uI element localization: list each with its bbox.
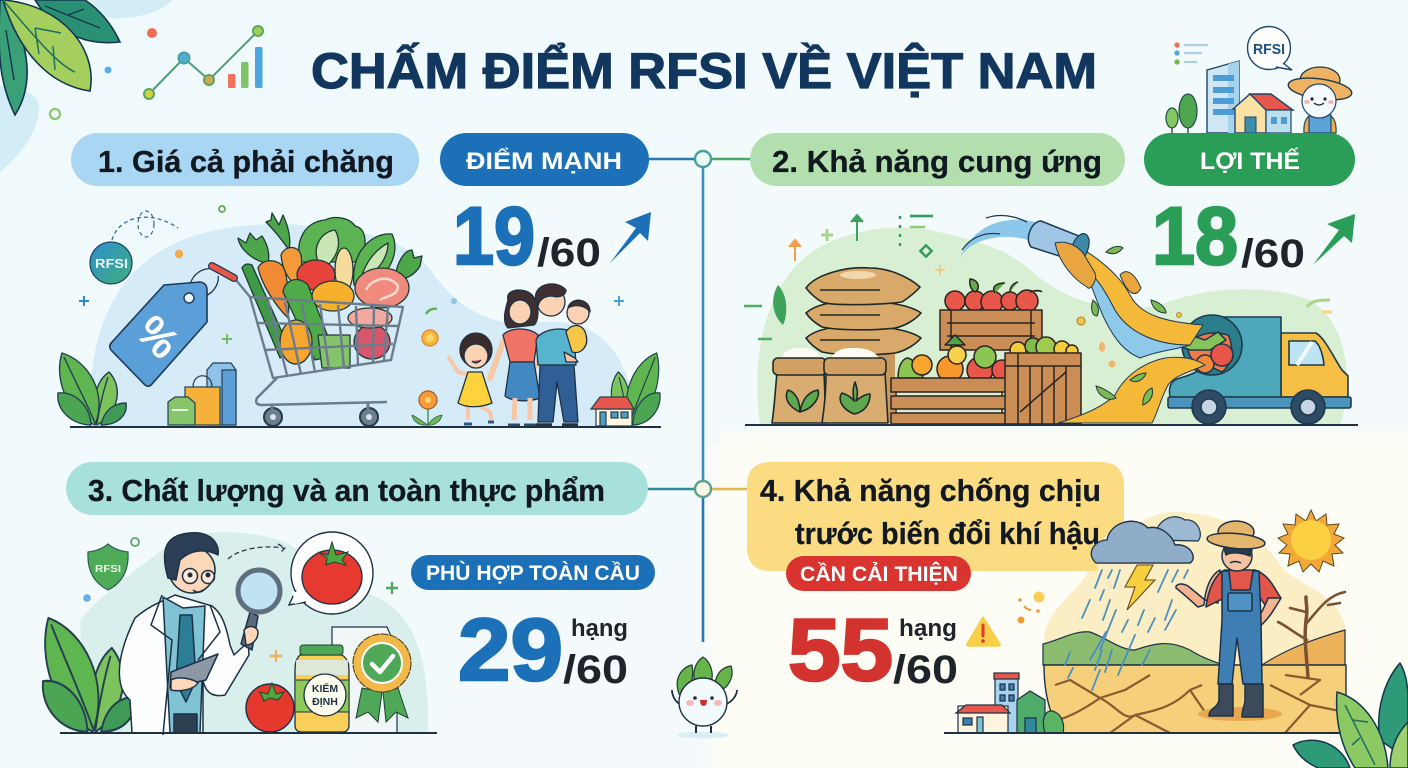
badge: advantage <box>1144 133 1355 186</box>
arrow up <box>1313 214 1355 265</box>
panel: 2 availability <box>744 133 1358 425</box>
ground line <box>944 732 1340 734</box>
background blob <box>1044 512 1345 733</box>
icon: vegetables in cart <box>238 213 422 368</box>
heading pill: availability: 2. Khả năng cung ứng <box>772 144 1102 179</box>
badge: globally aligned <box>411 555 655 590</box>
heading pill: quality <box>66 462 648 515</box>
arrow up <box>610 212 651 263</box>
illustration: food scientist <box>43 532 437 735</box>
father <box>536 284 578 425</box>
score rank 29/60 <box>458 600 628 699</box>
icon: RFSI ball: RFSI <box>95 256 128 271</box>
score rank 29/60: hạng <box>571 615 628 642</box>
icon: crates of produce <box>891 279 1081 424</box>
score 19/60 <box>453 191 601 282</box>
badge: needs improvement: CẦN CẢI THIỆN <box>800 562 958 586</box>
storm cloud overlapping heading <box>1091 521 1193 563</box>
decoration: top-right town and mascot <box>1166 26 1353 133</box>
background blob <box>90 224 640 427</box>
icon: shopping cart <box>236 280 403 426</box>
score 18/60 <box>1152 191 1305 282</box>
icon: jar labelled KIEM DINH: KIỂM <box>312 682 338 695</box>
score 18/60: /60 <box>1241 232 1305 276</box>
panel: 3 quality and food safety <box>43 462 655 735</box>
score rank 29/60: /60 <box>563 648 628 692</box>
icon: delivery truck <box>1168 315 1351 424</box>
icon: RFSI ball <box>90 211 178 284</box>
icon: village <box>956 673 1064 733</box>
heading box: climate resilience: trước biến đổi khí hậu <box>795 516 1100 551</box>
background blob <box>757 227 1347 425</box>
icon: small house <box>591 397 634 426</box>
icon: flower and coin <box>412 309 442 425</box>
score rank 55/60: hạng <box>899 615 957 642</box>
icon: plants <box>58 353 126 425</box>
heading pill: affordability: 1. Giá cả phải chăng <box>98 144 394 179</box>
baby <box>564 300 590 362</box>
ground line <box>60 732 437 734</box>
score rank 29/60: 29 <box>458 600 563 699</box>
mother <box>490 290 542 425</box>
heading box: climate resilience: 4. Khả năng chống chịu <box>760 473 1101 508</box>
icon: warning triangle <box>967 617 1000 646</box>
badge: needs improvement <box>786 556 971 591</box>
decoration: top-right town and mascot: RFSI <box>1253 41 1285 58</box>
decoration: bottom-right leaves <box>1293 663 1408 768</box>
score rank 55/60: 55 <box>788 600 893 699</box>
score 19/60: 19 <box>453 191 535 282</box>
icon: jar labelled KIEM DINH <box>295 645 349 732</box>
score rank 55/60 <box>788 600 958 699</box>
icon: family <box>449 284 590 425</box>
heading pill: affordability <box>71 133 419 186</box>
badge: strength: ĐIỂM MẠNH <box>466 147 622 175</box>
icon: scientist <box>119 533 280 735</box>
icon: tipping pipe and flow <box>960 215 1205 423</box>
decoration: top-left leaves <box>0 0 120 115</box>
icon: price tag: % <box>126 306 189 369</box>
badge: globally aligned: PHÙ HỢP TOÀN CẦU <box>426 561 640 585</box>
panel: 4 climate resilience <box>747 462 1346 733</box>
icon: small groceries <box>168 363 236 425</box>
illustration: farmer in changing climate <box>1043 510 1346 733</box>
mascot: rice ball with leaves <box>672 657 737 738</box>
heading pill: quality: 3. Chất lượng và an toàn thực phẩm <box>88 473 605 508</box>
illustration: food supply chain <box>744 215 1358 425</box>
badge: strength <box>440 133 649 186</box>
icon: sun <box>1278 510 1344 572</box>
icon: tomato in speech bubble <box>228 532 373 614</box>
scenery: hills and cracked earth <box>1043 630 1346 733</box>
panel: 1 affordability <box>58 133 661 427</box>
score 19/60: /60 <box>537 231 601 275</box>
icon: RFSI shield: RFSI <box>95 563 121 575</box>
icon: plant <box>43 618 135 732</box>
icon: RFSI shield <box>88 544 128 590</box>
icon: storm cloud and rain <box>1065 517 1200 690</box>
icon: jar labelled KIEM DINH: ĐỊNH <box>312 696 338 708</box>
heading pill: availability <box>750 133 1125 186</box>
ground line <box>745 424 1358 426</box>
connector: vertical timeline with nodes <box>648 151 750 642</box>
badge: advantage: LỢI THẾ <box>1200 147 1300 175</box>
decoration: line and bar chart icon <box>50 26 263 119</box>
score rank 55/60: /60 <box>893 648 958 692</box>
ground line <box>70 426 661 428</box>
background blob <box>80 532 428 733</box>
score 18/60: 18 <box>1152 191 1238 282</box>
decoration: arrows and marks <box>744 215 1332 339</box>
icon: price tag <box>110 269 222 386</box>
icon: bare tree <box>1278 592 1345 677</box>
heading box: climate resilience <box>747 462 1124 571</box>
title: CHẤM ĐIỂM RFSI VỀ VIỆT NAM <box>311 43 1097 99</box>
icon: small tomato <box>246 683 294 732</box>
icon: certified bag and rosette <box>332 627 411 733</box>
icon: farmer <box>1176 521 1281 717</box>
decoration: sparks <box>1018 592 1044 624</box>
illustration: shopping cart and family <box>58 206 661 427</box>
icon: grain sacks <box>772 268 921 423</box>
girl <box>449 333 494 424</box>
